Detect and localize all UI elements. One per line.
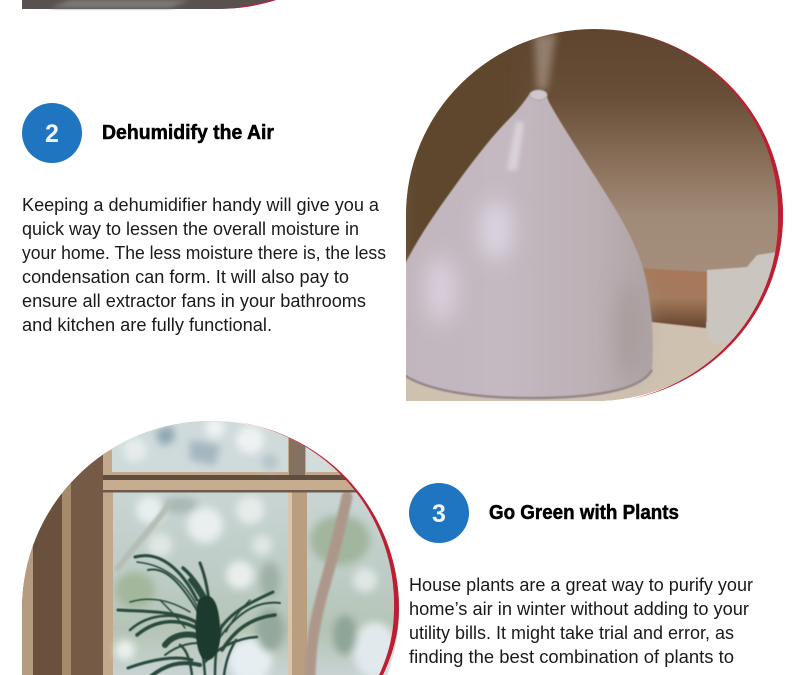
step 2 body text — [22, 194, 386, 335]
step 3 body text: House plants are a great way to purify your — [409, 574, 753, 595]
step 2 badge — [22, 103, 82, 163]
step 2 body text: Keeping a dehumidifier handy will give you a — [22, 194, 380, 215]
step 2 body text: condensation can form. It will also pay to — [22, 266, 349, 287]
left dark wall shading — [406, 40, 532, 263]
step 2 heading: Dehumidify the Air — [102, 122, 274, 144]
red arc border — [610, 30, 783, 398]
step 2 badge: 2 — [45, 120, 59, 148]
diffuser highlights — [425, 200, 644, 380]
mullion shade — [289, 438, 305, 475]
step 3 badge: 3 — [432, 500, 446, 528]
frame dark line — [103, 475, 346, 480]
step 2 body text: ensure all extractor fans in your bathrooms — [22, 290, 366, 311]
top rail of main frame — [103, 480, 399, 490]
wooden handle — [642, 268, 708, 328]
window frame — [103, 421, 399, 675]
diffuser body — [404, 92, 653, 397]
potted palm plant — [118, 556, 280, 675]
pane bokeh and foliage — [115, 496, 397, 675]
step 3 body text — [409, 574, 753, 667]
mullion light side — [288, 490, 292, 675]
wall strips left of window — [22, 453, 105, 675]
step 2 body text: your home. The less moisture there is, the less — [22, 242, 386, 263]
red arc border — [233, 422, 399, 675]
white sleeve — [706, 252, 776, 344]
diffuser ridge highlight — [507, 122, 524, 170]
step 3 heading: Go Green with Plants — [489, 502, 679, 524]
plant centre foliage — [196, 596, 220, 660]
photo background wall — [406, 29, 783, 401]
step 3 body text: finding the best combination of plants to — [409, 646, 734, 667]
step 3 body text: home’s air in winter without adding to your — [409, 598, 749, 619]
step 2 body text: and kitchen are fully functional. — [22, 314, 272, 335]
blurred branches — [118, 497, 347, 675]
upper panes — [112, 421, 288, 472]
main pane — [113, 492, 288, 675]
photo: window with potted plant — [20, 418, 401, 675]
step 2 body text: quick way to lessen the overall moisture in — [22, 218, 359, 239]
diffuser base rim — [404, 370, 652, 398]
step 3 badge — [409, 483, 469, 543]
upper bokeh — [123, 418, 278, 470]
steam — [534, 33, 556, 90]
step 3 body text: utility bills. It might take trial and error, as — [409, 622, 734, 643]
diffuser nozzle — [530, 90, 547, 100]
photo: dehumidifier — [395, 29, 790, 401]
previous section image sliver — [22, 0, 276, 9]
right pane — [307, 492, 399, 675]
table surface — [406, 322, 730, 401]
